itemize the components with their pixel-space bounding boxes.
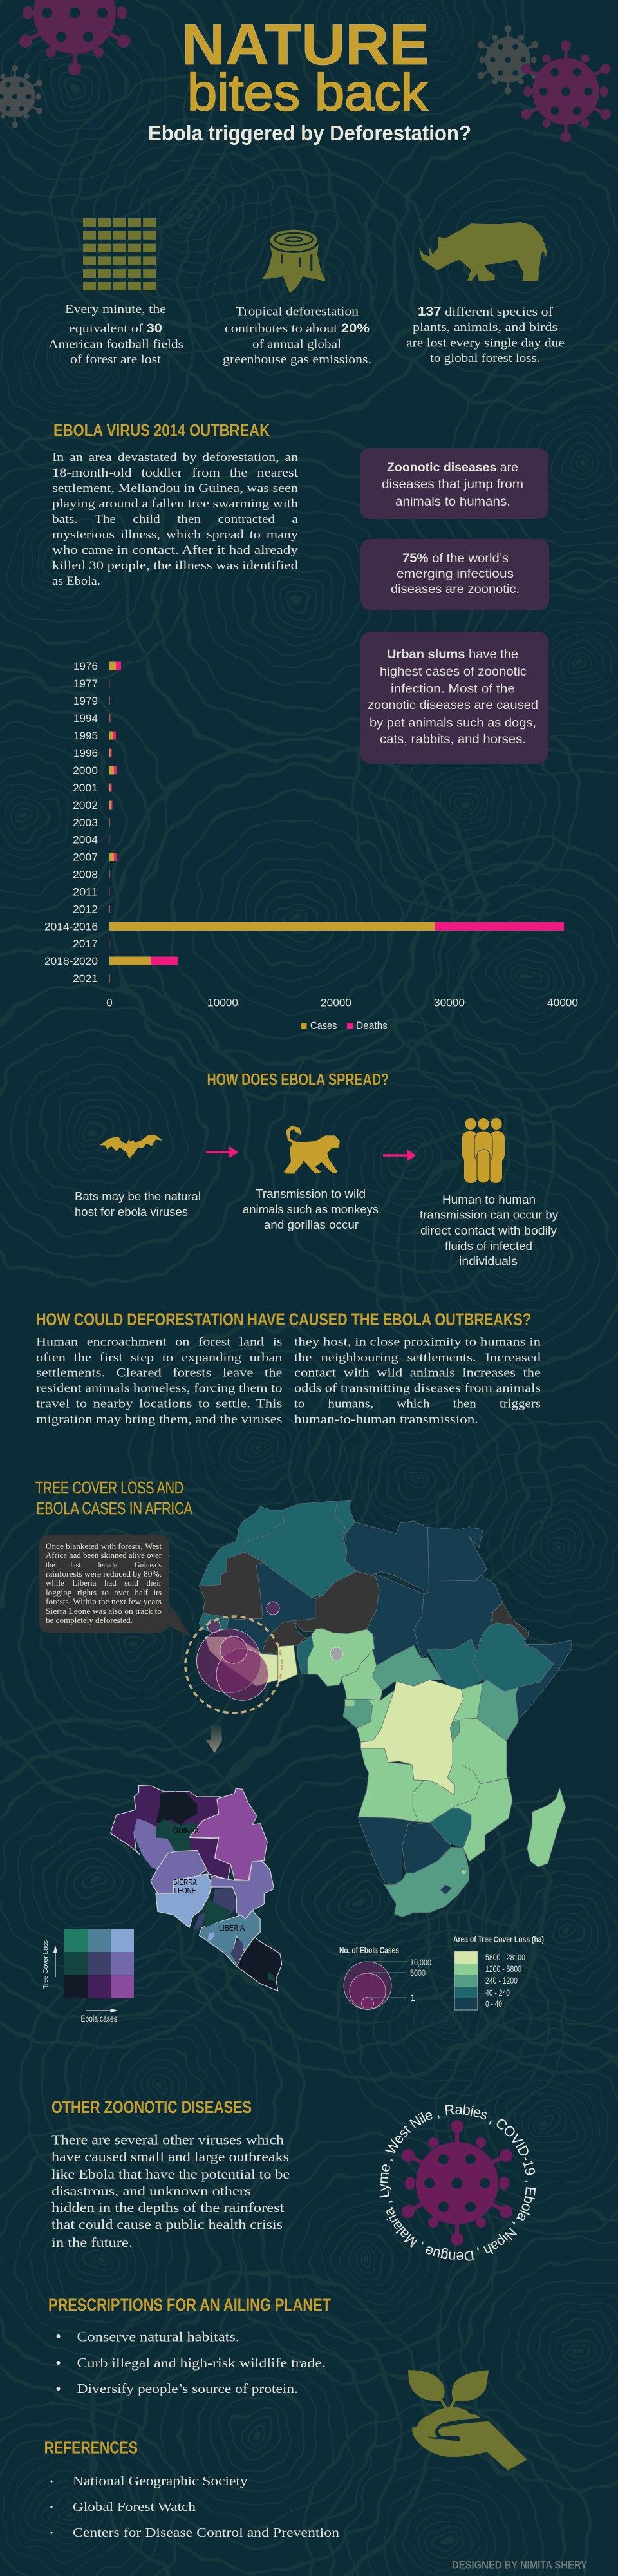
text block: outbreak story: killed 30 people, the illness was identified <box>52 559 299 573</box>
Botswana <box>402 1823 451 1874</box>
text block: outbreak story: bats. The child then contracted a <box>52 513 299 526</box>
heading: other zoonotic diseases: OTHER ZOONOTIC DISEASES <box>52 2098 252 2117</box>
title <box>148 13 471 145</box>
callout: West Africa deforestation: rainforests were reduced by 80%, <box>46 1569 162 1578</box>
stat text: greenhouse gas: greenhouse gas emissions. <box>223 353 371 366</box>
step text: human to human: direct contact with bodily <box>420 1224 557 1237</box>
x axis labels <box>106 997 578 1009</box>
year labels: 1979 <box>73 695 98 707</box>
panel: urban slums card: infection. Most of the <box>391 683 515 696</box>
year labels: 2018-2020 <box>44 955 98 967</box>
x axis labels: 10000 <box>207 997 238 1009</box>
country labels: SIERRA <box>173 1877 197 1887</box>
callout: West Africa deforestation: logging rights to over half its <box>46 1588 162 1597</box>
step text: wild animals: animals such as monkeys <box>243 1203 379 1216</box>
stat text: species lost <box>406 305 565 365</box>
stat text: greenhouse gas: of annual global <box>252 337 341 352</box>
Niger <box>294 1571 379 1634</box>
icon: central virus <box>402 2120 512 2246</box>
callout: West Africa deforestation: be completely deforested. <box>46 1616 133 1625</box>
year labels: 2012 <box>73 903 98 915</box>
South Sudan <box>427 1639 483 1689</box>
callout: West Africa deforestation: Africa had been skinned alive over <box>46 1551 162 1560</box>
Kenya <box>477 1680 518 1741</box>
Guinea, Sierra Leone, Liberia and Cote d'Ivoire <box>205 1637 279 1686</box>
Rwanda and Burundi <box>450 1721 459 1740</box>
panel: zoonotic definition card: diseases that jump from <box>382 478 523 491</box>
heading: tree cover loss and Ebola cases in Africa <box>35 1478 193 1518</box>
panel: 75 percent card: emerging infectious <box>397 567 514 581</box>
icon: grey virus right <box>478 25 538 94</box>
step text: wild animals <box>243 1188 379 1231</box>
text block: outbreak story: settlement, Meliandou in Guinea, was seen <box>52 482 299 495</box>
step text: bats <box>75 1190 201 1218</box>
step text: human to human: Human to human <box>442 1193 536 1206</box>
heading: tree cover loss and Ebola cases in Africa: TREE COVER LOSS AND <box>35 1478 183 1497</box>
panel: urban slums card: Urban slums have the <box>387 648 518 661</box>
Algeria <box>245 1501 357 1598</box>
Tunisia <box>335 1500 355 1535</box>
text block: outbreak story: mysterious illness, which spread to many <box>52 528 299 542</box>
stat text: species lost: to global forest loss. <box>430 352 540 365</box>
icon: rhino <box>418 222 547 281</box>
country labels: GUINEA <box>173 1826 199 1835</box>
stat text: football fields: Every minute, the <box>65 303 166 316</box>
year labels: 2004 <box>73 833 98 846</box>
region: Liberia blue grey <box>199 1911 260 1966</box>
Morocco and Western Sahara <box>199 1506 285 1586</box>
bubbles: Ebola cases on map <box>197 1602 343 1700</box>
text block: deforestation column one: often the first step to expanding urban <box>36 1351 283 1365</box>
region: Guinea west dark purple <box>110 1785 230 1879</box>
text block: deforestation column two: the neighbouring settlements. Increased <box>294 1351 541 1365</box>
region: Guinea east violet <box>189 1788 267 1880</box>
x axis labels: 0 <box>106 997 113 1009</box>
region: Guinea south-east slate <box>211 1861 274 1919</box>
bars <box>109 662 564 983</box>
chart legend <box>301 1019 388 1032</box>
icon: hand holding plant <box>408 2370 527 2470</box>
text block: deforestation column two: human-to-human transmission. <box>294 1413 478 1426</box>
text block: deforestation column one: travel to nearby locations to settle. This <box>36 1397 283 1411</box>
step text: bats: Bats may be the natural <box>75 1190 201 1203</box>
year labels: 2002 <box>73 799 98 811</box>
region: Sierra Leone south <box>156 1874 212 1927</box>
legend: number of Ebola cases: 10,000 <box>410 1957 431 1967</box>
Sudan <box>414 1575 503 1658</box>
text block: outbreak story: playing around a fallen tree swarming with <box>52 497 299 511</box>
legend: area of tree cover loss: 40 - 240 <box>485 1987 510 1998</box>
circular list of diseases: Rabies , COVID-19 , Ebola , Nipah , Dengue , Malaria , Lyme , West Nile , <box>380 2105 536 2261</box>
Togo and Benin <box>297 1636 314 1674</box>
legend: bivariate matrix <box>42 1929 134 2023</box>
x axis labels: 40000 <box>547 997 578 1009</box>
year labels: 1977 <box>73 677 98 690</box>
stat text: football fields: equivalent of 30 <box>69 322 162 336</box>
region: Sierra Leone north <box>151 1850 209 1893</box>
step text: human to human: transmission can occur by <box>420 1209 558 1222</box>
icon: three people <box>462 1118 505 1183</box>
panel: zoonotic definition card: Zoonotic diseases are <box>387 461 518 475</box>
Mauritania <box>199 1552 264 1620</box>
credit: DESIGNED BY NIMITA SHERY <box>452 2559 588 2571</box>
year labels: 1996 <box>73 747 98 759</box>
Uganda <box>453 1683 483 1719</box>
country labels <box>173 1826 245 1933</box>
legend: number of Ebola cases: No. of Ebola Cases <box>339 1946 399 1955</box>
step text: human to human <box>420 1193 558 1267</box>
legend: area of tree cover loss: 0 - 40 <box>485 1998 502 2009</box>
region: Liberia west slate <box>193 1913 205 1931</box>
callout: West Africa deforestation: Once blanketed with forests, West <box>46 1542 162 1551</box>
bar chart: Ebola cases and deaths by year <box>44 660 578 1032</box>
region: Guinea west slate <box>133 1818 176 1870</box>
year labels: 1976 <box>73 660 98 672</box>
year labels: 2008 <box>73 868 98 880</box>
Egypt <box>427 1528 487 1581</box>
text block: other zoonotic diseases: hidden in the depths of the rainforest <box>52 2200 285 2215</box>
Zimbabwe <box>430 1808 471 1848</box>
text block: deforestation column one: Human encroachment on forest land is <box>36 1336 282 1349</box>
text block: other zoonotic diseases: There are several other viruses which <box>52 2132 285 2147</box>
year labels: 2014-2016 <box>44 920 98 933</box>
heading: Ebola virus 2014 outbreak: EBOLA VIRUS 2014 OUTBREAK <box>53 421 270 440</box>
Cameroon <box>341 1650 382 1700</box>
icon: grey virus left <box>0 65 42 128</box>
heading: prescriptions for an ailing planet: PRESCRIPTIONS FOR AN AILING PLANET <box>48 2295 331 2315</box>
stat text: greenhouse gas <box>223 305 371 366</box>
text block: deforestation column one: migration may bring them, and the viruses <box>36 1413 282 1426</box>
map: Africa tree cover loss choropleth <box>199 1500 572 1917</box>
year labels: 2003 <box>73 817 98 829</box>
title line 2: bites back <box>187 64 428 121</box>
legend: number of Ebola cases: 1 <box>410 1993 415 2003</box>
year labels: 2000 <box>73 764 98 777</box>
icon: purple virus top left <box>19 0 130 75</box>
axis label: Ebola cases: Ebola cases <box>81 2014 117 2023</box>
region: Guinea south teal <box>203 1900 230 1927</box>
text block: deforestation column one <box>36 1336 283 1426</box>
panel: zoonotic definition card: animals to humans. <box>395 495 510 509</box>
year labels: 2007 <box>73 851 98 863</box>
chart legend: Cases <box>310 1019 337 1032</box>
stat text: football fields <box>48 303 183 366</box>
highlight: dashed ring around West Africa <box>185 1616 282 1713</box>
heading: tree cover loss and Ebola cases in Africa: EBOLA CASES IN AFRICA <box>36 1499 193 1518</box>
arrow: bat to monkey <box>206 1148 236 1156</box>
Gabon <box>343 1699 373 1728</box>
chart legend: Deaths <box>356 1019 388 1032</box>
text block: other zoonotic diseases: have caused small and large outbreaks <box>52 2149 289 2164</box>
x axis labels: 20000 <box>321 997 351 1009</box>
South Africa <box>384 1847 469 1917</box>
stat text: greenhouse gas: Tropical deforestation <box>236 305 359 318</box>
stat text: species lost: plants, animals, and birds <box>413 321 557 334</box>
panel: 75 percent card: 75% of the world’s <box>402 552 509 565</box>
panel: urban slums card: highest cases of zoonotic <box>380 665 527 679</box>
panel: urban slums card: zoonotic diseases are caused <box>368 699 538 712</box>
list: references <box>50 2474 339 2540</box>
text block: deforestation column two <box>294 1336 541 1426</box>
list: references: Global Forest Watch <box>73 2500 196 2514</box>
list: prescriptions: Conserve natural habitats. <box>77 2329 239 2344</box>
year labels: 1995 <box>73 730 98 742</box>
legend: number of Ebola cases: 5000 <box>410 1967 426 1978</box>
year labels <box>44 660 98 985</box>
list: prescriptions <box>57 2329 326 2396</box>
Ethiopia <box>473 1623 554 1692</box>
arrow: zoom to detail map <box>206 1725 222 1753</box>
map: Guinea, Sierra Leone, Liberia bivariate <box>110 1785 282 1991</box>
icon: monkey <box>284 1126 340 1174</box>
Senegal and Gambia <box>199 1613 229 1631</box>
arrow: monkey to humans <box>383 1151 414 1159</box>
year labels: 2017 <box>73 938 98 950</box>
subtitle: Ebola triggered by Deforestation? <box>148 121 471 145</box>
text block: deforestation column two: odds of transmitting diseases from animals <box>294 1382 541 1396</box>
text block: deforestation column two: they host, in close proximity to humans in <box>294 1336 541 1349</box>
icon: tree stump <box>262 229 325 294</box>
callout: West Africa deforestation: forests. Within the next few years <box>46 1597 162 1606</box>
x axis labels: 30000 <box>434 997 465 1009</box>
text block: other zoonotic diseases <box>52 2132 290 2250</box>
stat text: football fields: of forest are lost <box>70 353 162 366</box>
step text: wild animals: and gorillas occur <box>264 1218 359 1231</box>
arrow: tree cover loss <box>54 1947 57 1977</box>
text block: outbreak story: as Ebola. <box>52 574 100 588</box>
callout: West Africa deforestation: the last decade. Guinea’s <box>46 1560 162 1569</box>
panel: urban slums card: by pet animals such as dogs, <box>370 716 536 730</box>
Madagascar <box>527 1788 566 1867</box>
panel: three stats <box>48 218 565 366</box>
year labels: 2021 <box>73 972 98 985</box>
text block: other zoonotic diseases: in the future. <box>52 2235 133 2250</box>
panel: 75 percent card: diseases are zoonotic. <box>391 583 520 596</box>
list: references: Centers for Disease Control and Prevention <box>73 2526 339 2540</box>
arrow: Ebola cases <box>86 2009 117 2012</box>
icon: purple virus right <box>521 41 611 142</box>
heading: references: REFERENCES <box>44 2438 138 2458</box>
region: Guinea south dark slate <box>213 1888 236 1919</box>
list: prescriptions: Diversify people’s source of protein. <box>77 2381 298 2396</box>
region: Liberia coast light <box>207 1932 215 1943</box>
list: references: National Geographic Society <box>73 2474 248 2488</box>
step text: human to human: individuals <box>459 1255 518 1267</box>
step text: wild animals: Transmission to wild <box>256 1188 366 1200</box>
southern borders <box>413 1765 510 1821</box>
Nigeria <box>308 1628 375 1686</box>
panel: spread chain <box>75 1118 558 1267</box>
callout: West Africa deforestation: Sierra Leone was also on track to <box>46 1607 162 1616</box>
Libya <box>345 1521 429 1593</box>
step text: bats: host for ebola viruses <box>75 1206 188 1218</box>
panel: zoonotic definition card <box>360 448 548 519</box>
Chad <box>367 1573 424 1666</box>
text block: other zoonotic diseases: like Ebola that have the potential to be <box>52 2166 290 2182</box>
legend: area of tree cover loss <box>453 1934 544 2010</box>
heading: how does Ebola spread: HOW DOES EBOLA SPREAD? <box>207 1070 389 1089</box>
text block: outbreak story: 18-month-old toddler from the nearest <box>52 466 299 480</box>
Congo <box>357 1690 394 1742</box>
text block: outbreak story: who came in contact. After it had already <box>52 544 299 557</box>
text block: outbreak story <box>52 451 299 588</box>
country labels: LEONE <box>174 1886 196 1895</box>
panel: urban slums card <box>360 632 548 764</box>
list: prescriptions: Curb illegal and high-risk wildlife trade. <box>77 2355 326 2371</box>
text block: outbreak story: In an area devastated by deforestation, an <box>52 451 299 464</box>
Mali <box>227 1564 315 1654</box>
text block: deforestation column one: settlements. Cleared forests leave the <box>36 1367 282 1379</box>
region: Liberia south slate <box>230 1938 243 1964</box>
year labels: 1994 <box>73 712 98 724</box>
callout: West Africa deforestation: while Liberia had sold their <box>46 1578 162 1587</box>
legend: area of tree cover loss: Area of Tree Cover Loss (ha) <box>453 1934 544 1944</box>
Ghana <box>278 1645 297 1683</box>
Democratic Republic of Congo <box>360 1680 464 1795</box>
text block: deforestation column two: contact with wild animals increases the <box>294 1367 541 1379</box>
text block: deforestation column two: to humans, which then triggers <box>294 1397 541 1411</box>
legend: area of tree cover loss: 5800 - 28100 <box>485 1952 525 1962</box>
icon: football fields grid <box>83 218 156 290</box>
region: Guinea north near black <box>156 1792 197 1826</box>
Lesotho <box>440 1885 452 1895</box>
title line 1: NATURE <box>182 13 429 77</box>
year labels: 2011 <box>73 886 98 898</box>
stat text: species lost: 137 different species of <box>418 305 554 319</box>
legend: number of Ebola cases <box>339 1946 431 2009</box>
Namibia <box>358 1817 414 1885</box>
stat text: football fields: American football fields <box>48 337 183 352</box>
icon: bat <box>100 1135 162 1159</box>
year labels: 2001 <box>73 782 98 794</box>
callout: West Africa deforestation <box>39 1535 191 1637</box>
Equatorial Guinea <box>345 1699 355 1707</box>
Central African Republic <box>373 1645 442 1690</box>
Burkina Faso <box>262 1621 306 1654</box>
legend: area of tree cover loss: 240 - 1200 <box>485 1975 518 1985</box>
Swaziland <box>460 1869 467 1876</box>
step text: human to human: fluids of infected <box>445 1240 532 1253</box>
region: Guinea centre teal <box>156 1819 197 1853</box>
text block: other zoonotic diseases: that could cause a public health crisis <box>52 2217 283 2232</box>
Eritrea and Djibouti <box>492 1602 529 1645</box>
text block: other zoonotic diseases: disastrous, and unknown others <box>52 2183 251 2199</box>
region: Cote d'Ivoire near black <box>236 1937 282 1991</box>
panel: urban slums card: cats, rabbits, and horses. <box>380 733 526 746</box>
text block: deforestation column one: resident animals homeless, forcing them to <box>36 1382 282 1396</box>
panel: 75 percent card <box>360 539 549 610</box>
country labels: LIBERIA <box>219 1923 245 1933</box>
Angola, Zambia, Tanzania, Mozambique <box>358 1718 512 1861</box>
region: Cote d'Ivoire teal <box>268 1972 275 1982</box>
axis label: tree cover loss: Tree Cover Loss <box>42 1940 50 1989</box>
stat text: species lost: are lost every single day due <box>406 336 565 350</box>
Somalia <box>516 1640 572 1721</box>
stat text: greenhouse gas: contributes to about 20% <box>225 322 370 336</box>
legend: area of tree cover loss: 1200 - 5800 <box>485 1964 521 1974</box>
